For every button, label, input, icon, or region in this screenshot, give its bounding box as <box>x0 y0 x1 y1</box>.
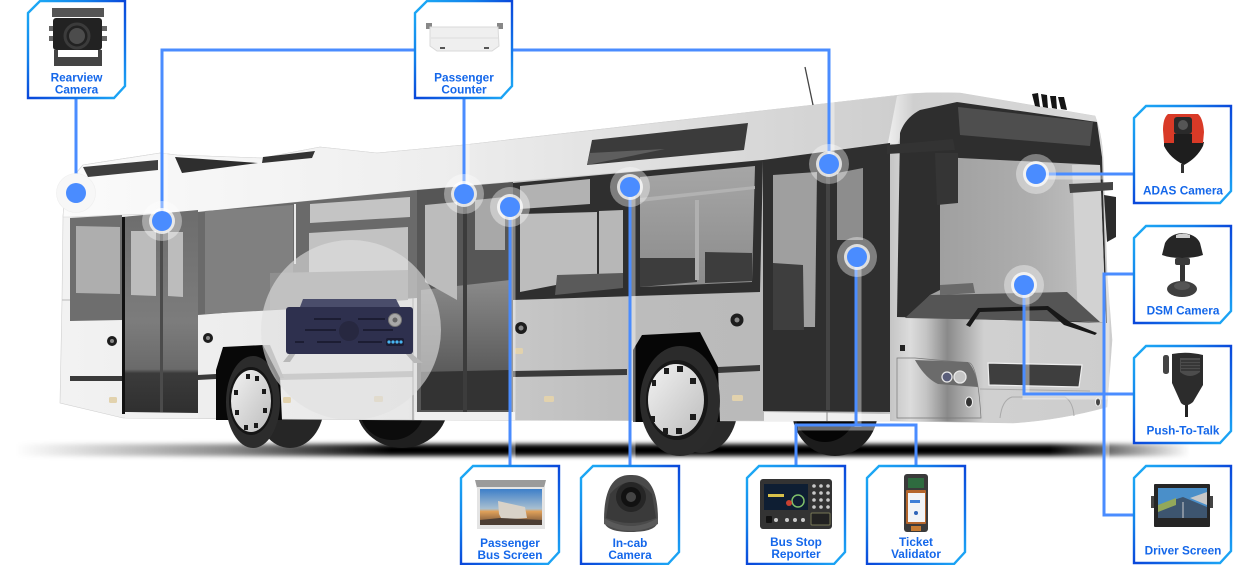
card: bus stop reporter <box>747 466 845 564</box>
connector: push-to-talk <box>1024 285 1134 394</box>
icon: MDVR recorder <box>283 299 423 363</box>
icon: ticket validator <box>904 474 928 532</box>
connector: in-cab camera <box>628 187 632 466</box>
connector: rearview camera <box>74 99 78 193</box>
card: in-cab camera: In-cab <box>613 536 647 550</box>
side windows left <box>198 190 417 315</box>
middle door <box>415 182 515 420</box>
card: ticket validator: Ticket <box>899 535 933 549</box>
hotspots <box>56 144 1056 305</box>
body seam lines <box>62 298 760 420</box>
icon: passenger bus screen <box>475 480 546 529</box>
card: ADAS camera: ADAS Camera <box>1143 184 1223 198</box>
connector: reporter and validator <box>796 257 916 466</box>
connector: DSM to driver screen <box>1104 274 1134 515</box>
rear and front wheels behind body <box>256 357 878 456</box>
right mirror <box>1069 182 1116 242</box>
side windows right <box>513 160 763 300</box>
card: push-to-talk <box>1134 346 1231 443</box>
icon: in-cab camera dome <box>604 475 658 532</box>
card: in-cab camera <box>581 466 679 564</box>
MDVR highlight disc <box>261 240 441 420</box>
card: passenger bus screen: Bus Screen <box>478 548 542 562</box>
hotspot: front door top <box>809 144 849 184</box>
card: rearview camera: Camera <box>55 82 99 96</box>
hotspot: in-cab <box>610 167 650 207</box>
connector lines <box>76 50 1136 517</box>
wheel arches <box>216 332 720 422</box>
card: rearview camera <box>28 1 125 98</box>
card: ticket validator: Validator <box>891 547 941 561</box>
hotspot: rear <box>56 174 96 212</box>
rear door <box>122 210 198 418</box>
icon: push-to-talk microphone <box>1163 353 1203 417</box>
card: DSM camera: DSM Camera <box>1147 304 1220 318</box>
icon: bus stop reporter <box>760 479 832 529</box>
connector: passenger counter right <box>513 50 829 164</box>
rear window <box>70 215 122 321</box>
connector: ADAS camera <box>1036 172 1134 176</box>
hotspot: passenger screen <box>490 187 530 227</box>
card: rearview camera: Rearview <box>51 70 103 84</box>
card: passenger counter: Counter <box>441 82 487 96</box>
cab roof <box>888 93 1103 157</box>
card: driver screen: Driver Screen <box>1145 544 1221 558</box>
icon: DSM camera <box>1162 233 1203 297</box>
card: bus stop reporter: Bus Stop <box>770 535 822 549</box>
card: passenger bus screen: Passenger <box>480 536 540 550</box>
card: in-cab camera: Camera <box>608 548 652 562</box>
icon: driver screen <box>1151 484 1213 527</box>
card: bus stop reporter: Reporter <box>771 547 821 561</box>
bus body shell <box>60 93 1112 423</box>
roof vents on cab <box>1032 93 1067 110</box>
card: ADAS camera <box>1134 106 1231 203</box>
front wheel <box>640 346 720 456</box>
card: DSM camera <box>1134 226 1231 323</box>
hotspot: dashboard <box>1004 265 1044 305</box>
left mirror <box>887 139 958 205</box>
hotspot: front door low <box>837 237 877 277</box>
card: driver screen <box>1134 466 1231 563</box>
front door <box>763 143 890 421</box>
hotspot: middle door <box>444 174 484 214</box>
card: passenger counter <box>415 1 512 98</box>
antenna <box>805 67 813 105</box>
roof vents <box>83 123 748 177</box>
card: passenger bus screen <box>461 466 559 564</box>
card: push-to-talk: Push-To-Talk <box>1147 424 1220 438</box>
connector: passenger bus screen <box>508 207 512 466</box>
cab and windshield <box>897 102 1107 335</box>
hotspot: windshield top <box>1016 154 1056 194</box>
card: ticket validator <box>867 466 965 564</box>
icon: rearview camera <box>49 8 107 66</box>
roof band <box>63 95 900 217</box>
card: passenger counter: Passenger <box>434 70 494 84</box>
icon: ADAS camera <box>1163 114 1204 173</box>
bus front lights and grille <box>897 345 1100 418</box>
bus illustration <box>60 67 1116 456</box>
connector: passenger counter left <box>162 50 414 221</box>
ground shadow <box>15 444 1190 456</box>
connector: passenger counter down <box>462 99 466 194</box>
icon: passenger counter <box>426 23 503 51</box>
hotspot: rear door <box>142 201 182 241</box>
rear wheel <box>226 356 280 448</box>
marker lamps <box>107 314 744 403</box>
